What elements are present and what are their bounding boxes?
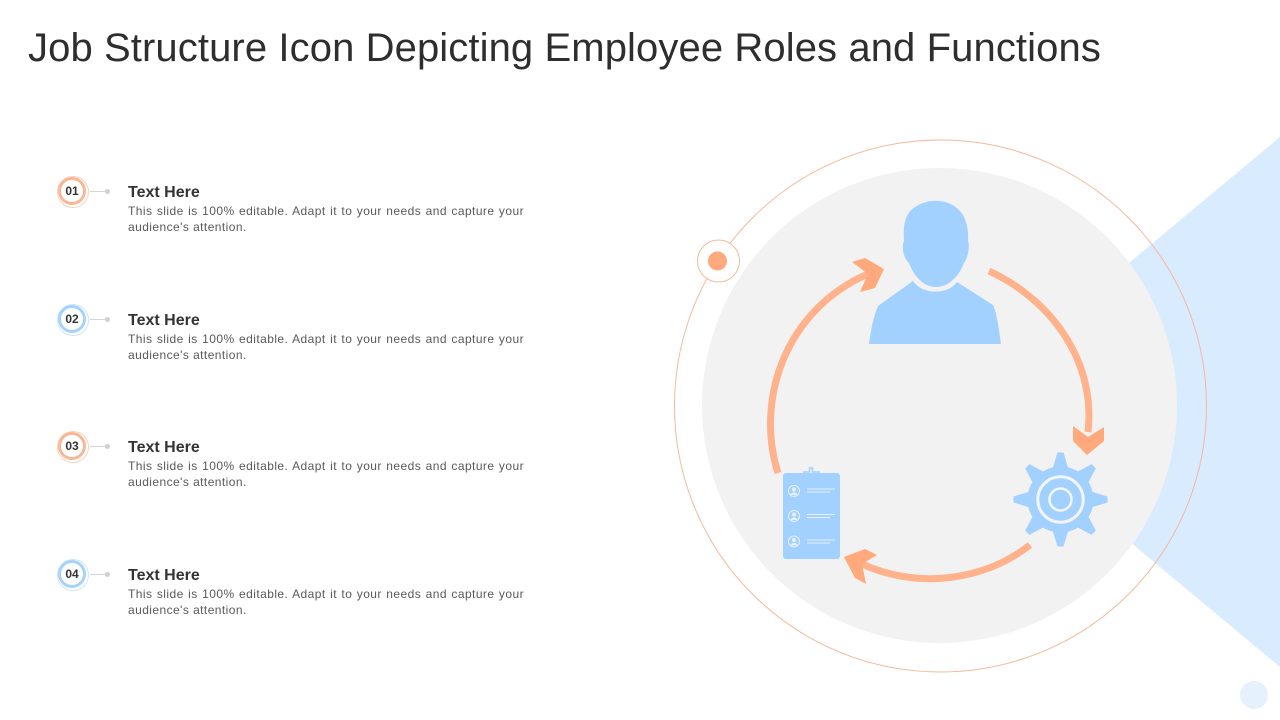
list item 02: Text Here [128,312,200,329]
list item 02: This slide is 100% editable. Adapt it to your needs and capture your audience's attention. [128,332,524,362]
outer ring [674,140,1206,672]
list item 02: 02 [65,312,79,326]
list item 02 [57,304,524,362]
list item 03 [57,431,524,489]
arrow: person to gear [989,271,1104,455]
icon: person [869,201,1001,344]
list item 04: 04 [65,567,79,581]
list item 04 [57,559,524,617]
list item 03: 03 [65,439,79,453]
list item 03: This slide is 100% editable. Adapt it to your needs and capture your audience's attention. [128,459,524,489]
icon: gear [1014,452,1108,546]
list item 01: 01 [65,184,79,198]
icon: clipboard [783,468,840,559]
background triangle [962,137,1280,667]
corner dot [1240,681,1268,709]
title: Job Structure Icon Depicting Employee Roles and Functions [28,26,1101,70]
arrow: clipboard to person [771,258,884,473]
inner grey disc [702,168,1177,643]
list item 01 [57,176,524,234]
list item 03: Text Here [128,439,200,456]
list item 01: Text Here [128,184,200,201]
list item 04: Text Here [128,567,200,584]
list item 04: This slide is 100% editable. Adapt it to your needs and capture your audience's attention. [128,587,524,617]
ring marker [698,240,740,282]
arrow: gear to clipboard [844,545,1030,584]
list item 01: This slide is 100% editable. Adapt it to your needs and capture your audience's attention. [128,204,524,234]
